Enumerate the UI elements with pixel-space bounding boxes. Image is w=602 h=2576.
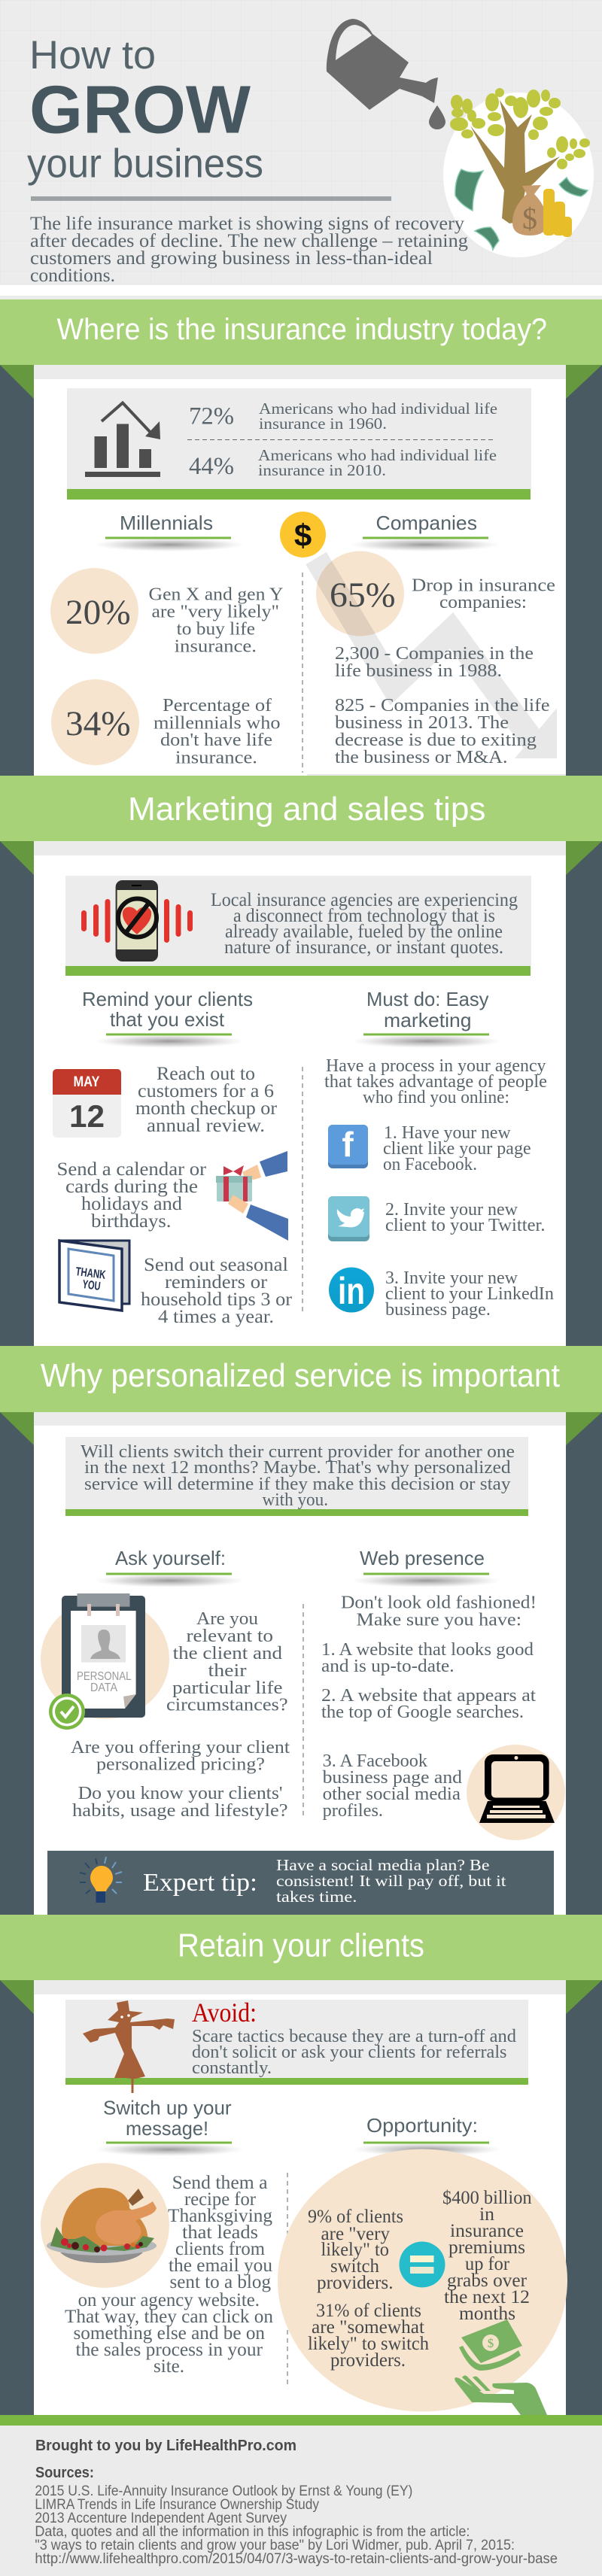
- text: recipe message: site.: [154, 2356, 184, 2377]
- header background: [0, 0, 602, 300]
- panel: avoid: Avoid:: [192, 1997, 257, 2028]
- icon: calendar: 12: [69, 1098, 105, 1134]
- icon: scarecrow: [83, 2000, 175, 2093]
- source list: "3 ways to retain clients and grow your base" by Lori Widmer, pub. April 7, 2015:: [35, 2538, 515, 2553]
- text: have a process: Have a process in your agency: [326, 1056, 546, 1076]
- stat: 400 billion: in: [479, 2204, 495, 2225]
- panel: opportunity circle: [278, 2149, 567, 2415]
- band: why personalized service is important: Why personalized service is important: [41, 1357, 560, 1394]
- stat: 31 percent: 31% of clients: [316, 2301, 421, 2321]
- text: have a process: who find you online:: [363, 1088, 509, 1107]
- heading: must do easy marketing: [351, 988, 502, 1048]
- text: company counts: business in 2013. The: [335, 713, 509, 733]
- icon: clipboard personal data: [41, 1593, 169, 1730]
- icon: money tree: $: [522, 202, 537, 235]
- icon: dollar coin: $: [294, 518, 312, 553]
- icon: laptop: [467, 1745, 565, 1840]
- text: questions: their: [208, 1661, 247, 1681]
- callout: expert tip: takes time.: [276, 1888, 357, 1906]
- text: calendar and cards: Send a calendar or: [57, 1159, 207, 1180]
- intro text: The life insurance market is showing signs of recovery: [30, 214, 465, 234]
- arrow: background decline: [316, 558, 536, 745]
- text: recipe message: [65, 2173, 273, 2377]
- heading: companies: [350, 512, 500, 551]
- text: recipe message: the sales process in your: [75, 2340, 263, 2360]
- title: your business: [27, 141, 263, 187]
- stat: 72 percent: [189, 399, 497, 433]
- panel: will clients switch: service will determine if they make this decision or stay: [84, 1475, 511, 1494]
- side columns: [0, 365, 602, 2415]
- text: questions: Are you: [196, 1609, 258, 1629]
- stat: 9 percent: 9% of clients: [308, 2207, 403, 2227]
- text: seasonal reminders: Send out seasonal: [144, 1255, 288, 1275]
- stat: 44 percent: 44%: [189, 453, 234, 480]
- stat: 34 percent: Percentage of: [163, 696, 272, 715]
- intro text: customers and growing business in less-than-ideal: [30, 248, 433, 269]
- stat: 9 percent: likely" to: [321, 2240, 389, 2260]
- stat: 400 billion: insurance: [450, 2221, 524, 2241]
- text: reach out: month checkup or: [135, 1098, 278, 1119]
- icon: calendar: [53, 1069, 121, 1138]
- stat: 400 billion: the next 12: [444, 2287, 530, 2307]
- band: retain your clients: [0, 1915, 602, 2014]
- stat: 72 percent: Americans who had individual life: [259, 399, 497, 418]
- panel: ownership statistics: [67, 388, 531, 500]
- stat: 400 billion: months: [459, 2304, 515, 2324]
- text: company counts: decrease is due to exiting: [335, 731, 537, 750]
- text: calendar and cards: cards during the: [65, 1177, 198, 1197]
- text: twitter step: 2. Invite your new: [385, 1200, 518, 1220]
- icon: money in hand: $: [488, 2336, 494, 2350]
- text: recipe message: that leads: [182, 2222, 258, 2243]
- panel: avoid: Scare tactics because they are a turn-off and: [192, 2027, 516, 2046]
- text: questions: relevant to: [187, 1627, 273, 1646]
- text: company counts: 825 - Companies in the life: [335, 696, 549, 715]
- heading: millennials: Millennials: [120, 512, 213, 534]
- text: have a process: [324, 1056, 547, 1107]
- text: reach out: [135, 1064, 278, 1136]
- stat: 34 percent: [51, 679, 280, 767]
- panel: avoid: don't solicit or ask your clients for referrals: [192, 2043, 507, 2062]
- band: retain your clients: Retain your clients: [178, 1927, 424, 1964]
- icon: gift exchange: [216, 1151, 288, 1241]
- band: why personalized service is important: [0, 1346, 602, 1445]
- heading: switch up your message: message!: [126, 2117, 208, 2140]
- text: questions: circumstances?: [166, 1696, 288, 1715]
- text: reach out: customers for a 6: [138, 1081, 274, 1101]
- stat: 400 billion: [442, 2188, 532, 2324]
- heading: remind your clients: that you exist: [110, 1008, 225, 1031]
- panel: will clients switch: with you.: [262, 1490, 328, 1510]
- icon: facebook: [328, 1125, 368, 1168]
- stat: 65 percent drop: [316, 551, 555, 636]
- text: have a process: that takes advantage of people: [324, 1072, 547, 1092]
- stat: 20 percent: to buy life: [177, 620, 255, 639]
- text: company counts: 2,300 - Companies in the: [335, 644, 534, 664]
- text: web presence list: 1. A website that looks good: [321, 1640, 534, 1660]
- stat: 9 percent: are "very: [321, 2224, 390, 2244]
- text: linkedin step: [385, 1268, 554, 1320]
- icon: facebook: f: [342, 1125, 354, 1164]
- heading: opportunity: [351, 2114, 502, 2156]
- footer: [0, 2415, 602, 2576]
- panel: will clients switch: Will clients switch their current provider for another one: [81, 1442, 515, 1462]
- heading: remind your clients: [82, 988, 253, 1048]
- callout: expert tip: consistent! It will pay off, but it: [276, 1872, 506, 1890]
- stat: 72 percent: insurance in 1960.: [259, 415, 387, 433]
- source list: http://www.lifehealthpro.com/2015/04/07/3-ways-to-retain-clients-and-grow-your-base: [35, 2551, 558, 2567]
- icon: light bulb: [80, 1857, 122, 1903]
- text: company counts: the business or M&A.: [335, 748, 507, 767]
- text: linkedin step: business page.: [385, 1300, 491, 1320]
- title: How to: [29, 33, 156, 77]
- text: twitter step: [385, 1200, 545, 1235]
- text: seasonal reminders: reminders or: [165, 1272, 268, 1293]
- text: seasonal reminders: household tips 3 or: [141, 1290, 293, 1310]
- text: questions: personalized pricing?: [96, 1754, 265, 1774]
- text: calendar and cards: [57, 1159, 207, 1232]
- text: disconnect: [211, 890, 518, 958]
- text: disconnect: a disconnect from technology that is: [233, 906, 495, 926]
- stat: 400 billion: grabs over: [447, 2271, 528, 2291]
- text: web presence list: other social media: [323, 1785, 461, 1804]
- text: facebook step: 1. Have your new: [384, 1123, 511, 1143]
- heading: must do easy marketing: Must do: Easy: [366, 988, 489, 1010]
- text: questions: Are you offering your client: [71, 1738, 290, 1757]
- heading: switch up your message: [94, 2096, 245, 2156]
- heading: switch up your message: Switch up your: [103, 2096, 232, 2119]
- title: GROW: [29, 72, 251, 147]
- icon: thank you card: YOU: [82, 1278, 101, 1293]
- text: recipe message: sent to a blog: [170, 2272, 271, 2292]
- text: web presence list: Make sure you have:: [357, 1610, 521, 1630]
- text: facebook step: client like your page: [383, 1139, 531, 1159]
- text: seasonal reminders: [141, 1255, 293, 1327]
- source list: 2013 Accenture Independent Agent Survey: [35, 2511, 287, 2526]
- stat: 20 percent: 20%: [65, 593, 131, 632]
- text: linkedin step: client to your LinkedIn: [385, 1284, 554, 1304]
- stat: 400 billion: $400 billion: [442, 2188, 532, 2208]
- text: recipe message: recipe for: [184, 2189, 257, 2210]
- text: reach out: Reach out to: [157, 1064, 255, 1084]
- source list: [35, 2483, 558, 2567]
- stat: 34 percent: millennials who: [154, 713, 280, 733]
- text: questions: particular life: [172, 1678, 283, 1698]
- callout: expert tip: Have a social media plan? Be: [276, 1856, 489, 1874]
- heading: millennials: [94, 512, 245, 551]
- heading: remind your clients: Remind your clients: [82, 988, 253, 1010]
- stat: 20 percent: are "very likely": [152, 602, 279, 621]
- text: web presence list: 3. A Facebook: [323, 1751, 427, 1771]
- title: [27, 33, 263, 187]
- source list: 2015 U.S. Life-Annuity Insurance Outlook by Ernst & Young (EY): [35, 2483, 412, 2499]
- band: marketing and sales tips: Marketing and sales tips: [128, 791, 485, 828]
- band: marketing and sales tips: [0, 776, 602, 875]
- text: recipe message: something else and be on: [74, 2323, 265, 2344]
- text: web presence list: the top of Google searches.: [321, 1703, 524, 1722]
- icon: dollar coin: [280, 512, 326, 557]
- icon: clipboard personal data: PERSONAL: [77, 1670, 132, 1683]
- icon: equals: [399, 2242, 445, 2287]
- stat: 34 percent: don't have life: [160, 731, 272, 750]
- text: calendar and cards: holidays and: [81, 1194, 183, 1214]
- stat: 44 percent: [189, 446, 497, 480]
- icon: declining bar chart: [85, 403, 160, 477]
- text: questions: Do you know your clients': [78, 1784, 282, 1803]
- source list: Data, quotes and all the information in this infographic is from the article:: [35, 2524, 470, 2540]
- text: recipe message: Send them a: [172, 2173, 268, 2193]
- stat: 20 percent: Gen X and gen Y: [149, 585, 283, 605]
- stat: 65 percent drop: 65%: [330, 576, 396, 615]
- stat: 65 percent drop: Drop in insurance: [412, 576, 555, 596]
- text: web presence list: 2. A website that appears at: [321, 1686, 536, 1706]
- heading: must do easy marketing: marketing: [384, 1009, 471, 1031]
- source list: LIMRA Trends in Life Insurance Ownership Study: [35, 2497, 319, 2513]
- text: reach out: annual review.: [147, 1116, 265, 1136]
- text: company counts: [335, 644, 549, 767]
- icon: turkey: [41, 2163, 169, 2288]
- heading: ask yourself: [94, 1547, 245, 1587]
- heading: companies: Companies: [376, 512, 477, 534]
- text: recipe message: clients from: [175, 2239, 266, 2259]
- text: recipe message: the email you: [169, 2256, 273, 2276]
- text: seasonal reminders: 4 times a year.: [158, 1307, 274, 1327]
- callout: expert tip: [47, 1851, 554, 1915]
- heading: ask yourself: Ask yourself:: [115, 1547, 226, 1569]
- text: recipe message: Thanksgiving: [168, 2206, 272, 2226]
- icon: linkedin: in: [338, 1270, 365, 1312]
- icon: watering can: [327, 19, 445, 129]
- icon: money in hand: [455, 2319, 547, 2415]
- band: where is the insurance industry today: [0, 299, 602, 399]
- heading: web presence: [351, 1547, 502, 1587]
- text: disconnect: nature of insurance, or instant quotes.: [224, 937, 503, 958]
- stat: 9 percent: switch: [330, 2256, 379, 2277]
- heading: opportunity: Opportunity:: [366, 2114, 478, 2137]
- text: web presence list: Don't look old fashioned!: [341, 1593, 537, 1613]
- panel: avoid: constantly.: [192, 2058, 272, 2078]
- intro text: [30, 214, 469, 286]
- icon: thank you card: [59, 1241, 129, 1311]
- intro text: after decades of decline. The new challenge – retaining: [30, 231, 469, 251]
- icon: money tree: [443, 88, 594, 257]
- stat: 20 percent: [50, 568, 283, 656]
- text: disconnect: Local insurance agencies are experiencing: [211, 890, 518, 910]
- stat: 34 percent: insurance.: [175, 748, 257, 767]
- icon: linkedin: [329, 1267, 374, 1312]
- icon: twitter: [328, 1196, 369, 1241]
- text: facebook step: on Facebook.: [383, 1155, 477, 1174]
- panel: will clients switch: in the next 12 months? Maybe. That's why personalized: [84, 1458, 511, 1478]
- icon: clipboard personal data: DATA: [90, 1681, 117, 1694]
- stat: 65 percent drop: companies:: [439, 593, 527, 612]
- stat: 72 percent: 72%: [189, 403, 234, 430]
- callout: expert tip: Expert tip:: [143, 1869, 257, 1897]
- panel: avoid: [65, 1997, 528, 2093]
- text: twitter step: client to your Twitter.: [385, 1216, 545, 1235]
- text: questions: the client and: [173, 1644, 282, 1663]
- intro text: conditions.: [30, 266, 115, 286]
- text: web presence list: [321, 1593, 537, 1821]
- stat: 20 percent: insurance.: [175, 636, 257, 656]
- stat: 44 percent: insurance in 2010.: [258, 461, 386, 479]
- stat: 34 percent: 34%: [65, 704, 131, 743]
- text: disconnect: already available, fueled by the online: [225, 922, 503, 942]
- text: recipe message: on your agency website.: [78, 2290, 260, 2310]
- text: web presence list: profiles.: [323, 1801, 383, 1821]
- panel: will clients switch: [65, 1437, 528, 1516]
- heading: web presence: Web presence: [360, 1547, 485, 1569]
- panel: technology disconnect: [65, 876, 531, 976]
- text: questions: [71, 1609, 290, 1821]
- stat: 9 percent: [308, 2207, 403, 2293]
- stat: 400 billion: up for: [465, 2254, 510, 2274]
- icon: calendar: MAY: [74, 1074, 100, 1090]
- text: questions: habits, usage and lifestyle?: [72, 1801, 288, 1821]
- text: web presence list: and is up-to-date.: [321, 1657, 455, 1676]
- footer: Sources:: [35, 2465, 94, 2481]
- text: company counts: life business in 1988.: [335, 661, 502, 681]
- band: where is the insurance industry today: Where is the insurance industry today?: [57, 313, 547, 346]
- text: facebook step: [383, 1123, 531, 1174]
- icon: phone with crossed heart: [81, 880, 193, 961]
- footer: Brought to you by LifeHealthPro.com: [35, 2438, 296, 2454]
- text: web presence list: business page and: [323, 1768, 462, 1788]
- text: recipe message: That way, they can click on: [65, 2307, 273, 2327]
- icon: thank you card: THANK: [75, 1265, 107, 1282]
- stat: 400 billion: premiums: [448, 2237, 525, 2258]
- stat: 31 percent: providers.: [330, 2350, 406, 2371]
- text: linkedin step: 3. Invite your new: [385, 1268, 518, 1288]
- stat: 9 percent: providers.: [317, 2273, 393, 2293]
- stat: 31 percent: [308, 2301, 429, 2371]
- text: calendar and cards: birthdays.: [91, 1211, 172, 1232]
- stat: 44 percent: Americans who had individual life: [258, 446, 497, 464]
- stat: 31 percent: are "somewhat: [312, 2317, 424, 2338]
- stat: 31 percent: likely" to switch: [308, 2334, 429, 2354]
